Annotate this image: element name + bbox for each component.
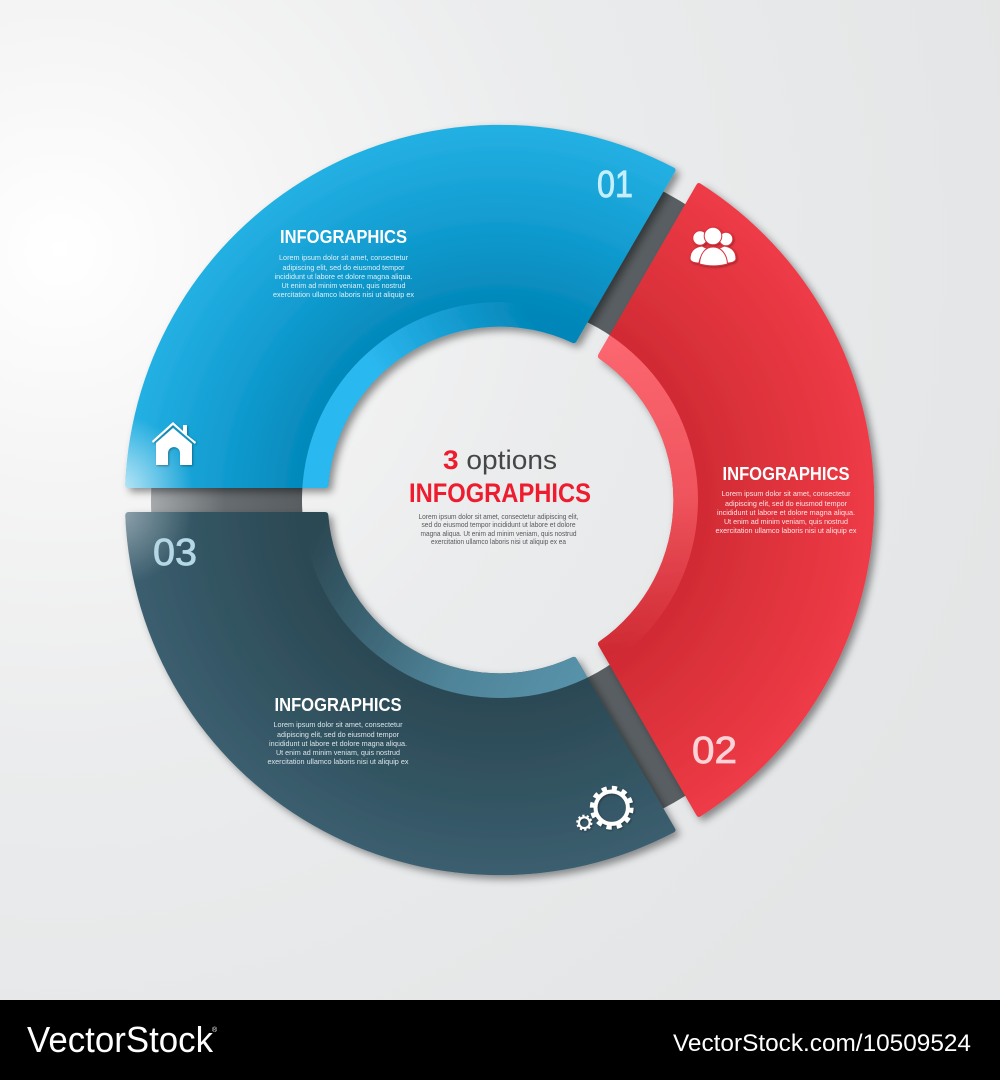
footer registered mark: ®	[212, 1026, 218, 1034]
center body text: magna aliqua. Ut enim ad minim veniam, quis nostrud	[420, 529, 576, 538]
body: segment 02	[716, 489, 857, 535]
center body text: Lorem ipsum dolor sit amet, consectetur adipiscing elit,	[418, 512, 578, 521]
heading: segment 03: INFOGRAPHICS	[274, 695, 402, 715]
text block: segment 02	[716, 464, 857, 535]
body: segment 01: exercitation ullamco laboris nisi ut aliquip ex	[273, 290, 414, 299]
center body text: sed do eiusmod tempor incididunt ut labore et dolore	[422, 520, 576, 529]
text block: segment 01	[273, 227, 414, 299]
body: segment 01	[273, 253, 414, 299]
panel: segment 02 red	[598, 183, 884, 824]
body: segment 01: Lorem ipsum dolor sit amet, consectetur	[279, 253, 409, 262]
body: segment 02: exercitation ullamco laboris nisi ut aliquip ex	[716, 526, 857, 535]
center heading: INFOGRAPHICS: INFOGRAPHICS	[409, 478, 591, 508]
body: segment 02: Ut enim ad minim veniam, quis nostrud	[724, 517, 848, 526]
body: segment 03: Ut enim ad minim veniam, quis nostrud	[276, 748, 400, 757]
center title: 3 options: 3 options	[443, 445, 557, 475]
body: segment 02: incididunt ut labore et dolore magna aliqua.	[717, 508, 855, 517]
panel: segment 01 blue	[124, 124, 684, 498]
connecting grey ring behind the segments	[226, 226, 774, 774]
icon: gears	[577, 788, 632, 830]
body: segment 03: incididunt ut labore et dolore magna aliqua.	[269, 739, 407, 748]
footer logo: VectorStock	[27, 1019, 214, 1060]
number 01: 01	[597, 164, 633, 206]
body: segment 01: incididunt ut labore et dolore magna aliqua.	[274, 272, 412, 281]
icon: people	[690, 227, 736, 266]
icon: house	[152, 422, 196, 465]
number 03: 03	[153, 532, 197, 574]
body: segment 02: adipiscing elit, sed do eiusmod tempor	[725, 499, 848, 508]
footer url: VectorStock.com/10509524	[673, 1030, 971, 1057]
number 02: 02	[692, 730, 737, 772]
heading: segment 02: INFOGRAPHICS	[722, 464, 850, 484]
body: segment 03: Lorem ipsum dolor sit amet, consectetur	[274, 720, 403, 729]
body: segment 02: Lorem ipsum dolor sit amet, consectetur	[722, 489, 851, 498]
center body text: exercitation ullamco laboris nisi ut aliquip ex ea	[431, 537, 566, 546]
body: segment 01: adipiscing elit, sed do eiusmod tempor	[282, 263, 405, 272]
panel: segment 03 dark teal	[124, 510, 684, 884]
heading: segment 01: INFOGRAPHICS	[280, 227, 407, 247]
text block: segment 03	[268, 695, 409, 766]
body: segment 03: exercitation ullamco laboris nisi ut aliquip ex	[268, 757, 409, 766]
footer bar	[0, 1000, 1000, 1080]
body: segment 03: adipiscing elit, sed do eiusmod tempor	[277, 730, 400, 739]
body: segment 03	[268, 720, 409, 766]
body: segment 01: Ut enim ad minim veniam, quis nostrud	[282, 281, 406, 290]
center body text	[418, 512, 578, 546]
